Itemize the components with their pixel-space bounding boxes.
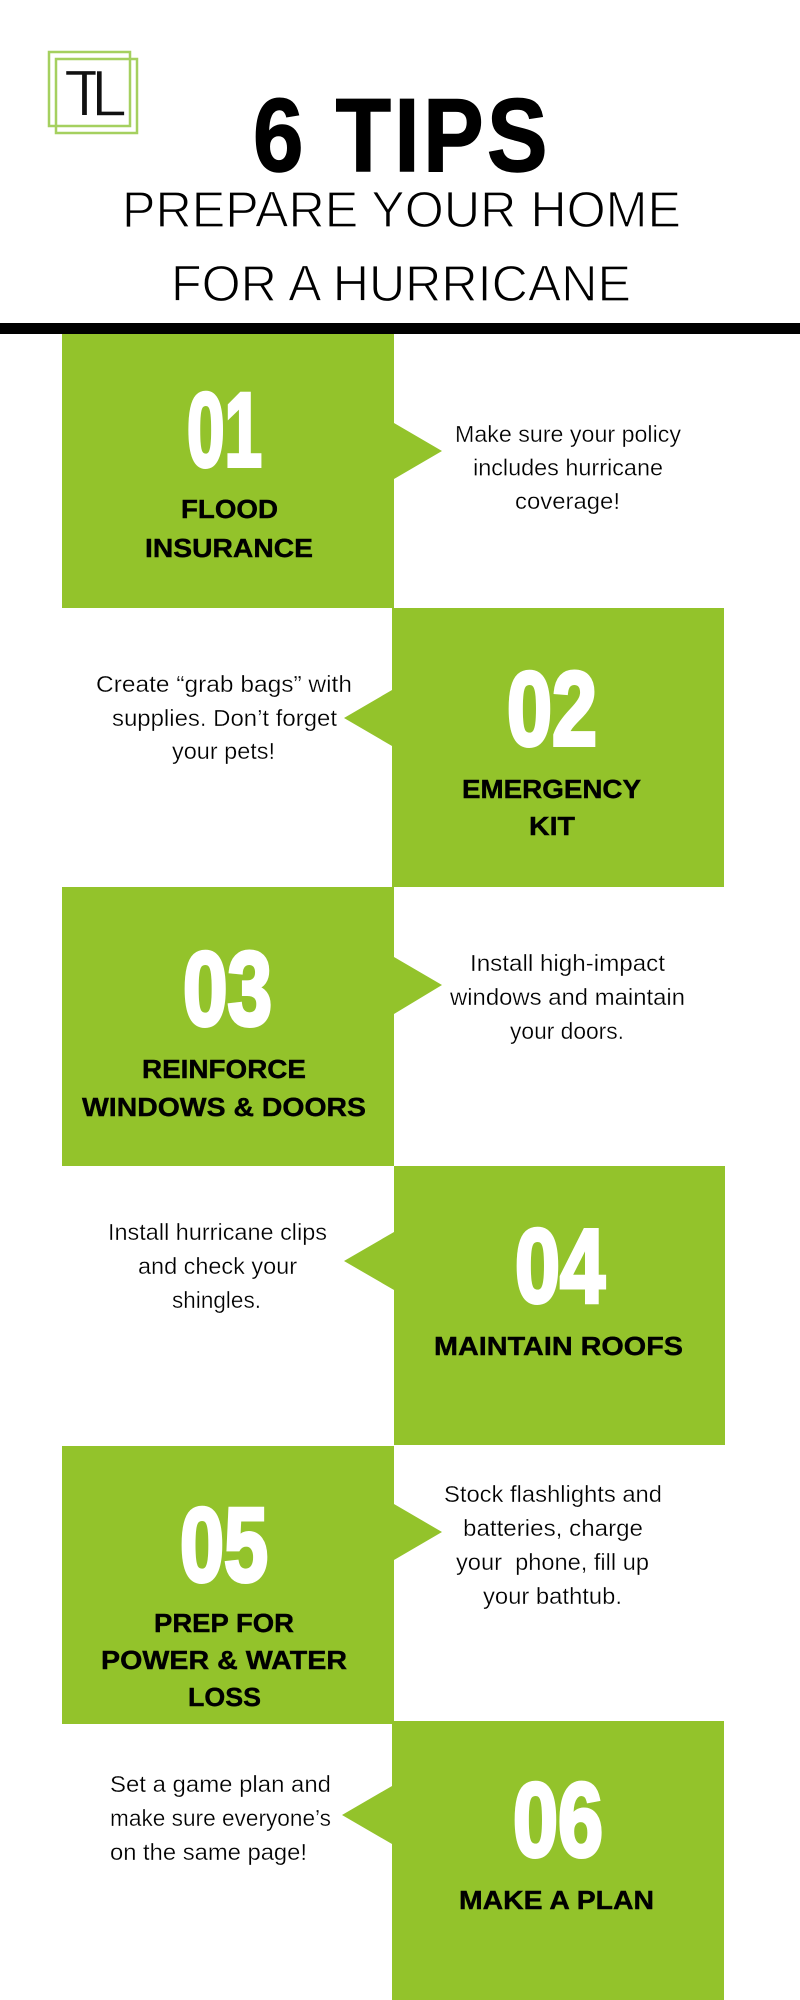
green box with arrow 03 (62, 887, 442, 1166)
panel: tip 04 (108, 1166, 725, 1445)
subtitle: PREPARE YOUR HOME (122, 181, 681, 238)
heading 05: PREP FOR (154, 1608, 294, 1638)
green box with arrow 05 (62, 1446, 442, 1724)
text 03: windows and maintain (449, 984, 685, 1010)
logo (49, 52, 137, 133)
text 02: Create “grab bags” with (96, 671, 352, 697)
heading 05: LOSS (188, 1682, 261, 1712)
heading 01: FLOOD (181, 494, 278, 524)
heading 06: MAKE A PLAN (459, 1885, 654, 1915)
logo: T (64, 56, 105, 130)
text 05: Stock flashlights and (444, 1481, 662, 1507)
text 02 (96, 671, 352, 764)
text 01: includes hurricane (473, 454, 663, 480)
heading 01: INSURANCE (145, 533, 313, 563)
heading 03 (82, 1054, 366, 1122)
text 05: batteries, charge (463, 1515, 643, 1541)
green box with arrow 02 (344, 608, 724, 887)
text 04: shingles. (172, 1287, 261, 1313)
text 02: supplies. Don’t forget (112, 705, 338, 731)
green box with arrow 01 (62, 334, 442, 608)
text 05 (444, 1481, 662, 1609)
number 05: 05 (180, 1487, 268, 1604)
panel: tip 02 (96, 608, 724, 887)
panel: tip 05 (62, 1446, 662, 1724)
heading 04: MAINTAIN ROOFS (434, 1331, 683, 1361)
heading 05: POWER & WATER (101, 1645, 347, 1675)
text 01: coverage! (515, 488, 620, 514)
number 03: 03 (183, 931, 272, 1048)
logo: L (91, 56, 127, 130)
number 01: 01 (187, 372, 262, 489)
green box with arrow 04 (344, 1166, 725, 1445)
text 02: your pets! (172, 738, 275, 764)
heading 05 (101, 1608, 347, 1712)
text 06: make sure everyone’s (110, 1805, 331, 1831)
heading 01 (145, 494, 313, 563)
number 04: 04 (515, 1208, 605, 1325)
text 05: your bathtub. (483, 1583, 622, 1609)
text 06: Set a game plan and (110, 1771, 331, 1797)
text 03 (449, 950, 685, 1044)
text 06 (110, 1771, 331, 1865)
green box with arrow 06 (342, 1721, 724, 2000)
header divider bar (0, 323, 800, 334)
heading 02 (462, 774, 641, 841)
panel: tip 06 (110, 1721, 724, 2000)
subtitle (122, 181, 681, 312)
text 04 (108, 1219, 327, 1313)
number 06: 06 (513, 1762, 603, 1879)
text 03: your doors. (510, 1018, 624, 1044)
panel: tip 03 (62, 887, 685, 1166)
text 01 (455, 421, 682, 514)
text 03: Install high-impact (470, 950, 666, 976)
text 04: Install hurricane clips (108, 1219, 327, 1245)
title: 6 tips: 6 TIPS (253, 78, 551, 194)
panel: tip 01 (62, 334, 682, 608)
heading 03: REINFORCE (142, 1054, 306, 1084)
text 04: and check your (138, 1253, 297, 1279)
text 01: Make sure your policy (455, 421, 682, 447)
text 05: your phone, fill up (456, 1549, 649, 1575)
subtitle: FOR A HURRICANE (171, 255, 631, 312)
number 02: 02 (507, 651, 597, 768)
heading 03: WINDOWS & DOORS (82, 1092, 366, 1122)
text 06: on the same page! (110, 1839, 307, 1865)
heading 02: KIT (529, 811, 575, 841)
heading 02: EMERGENCY (462, 774, 641, 804)
